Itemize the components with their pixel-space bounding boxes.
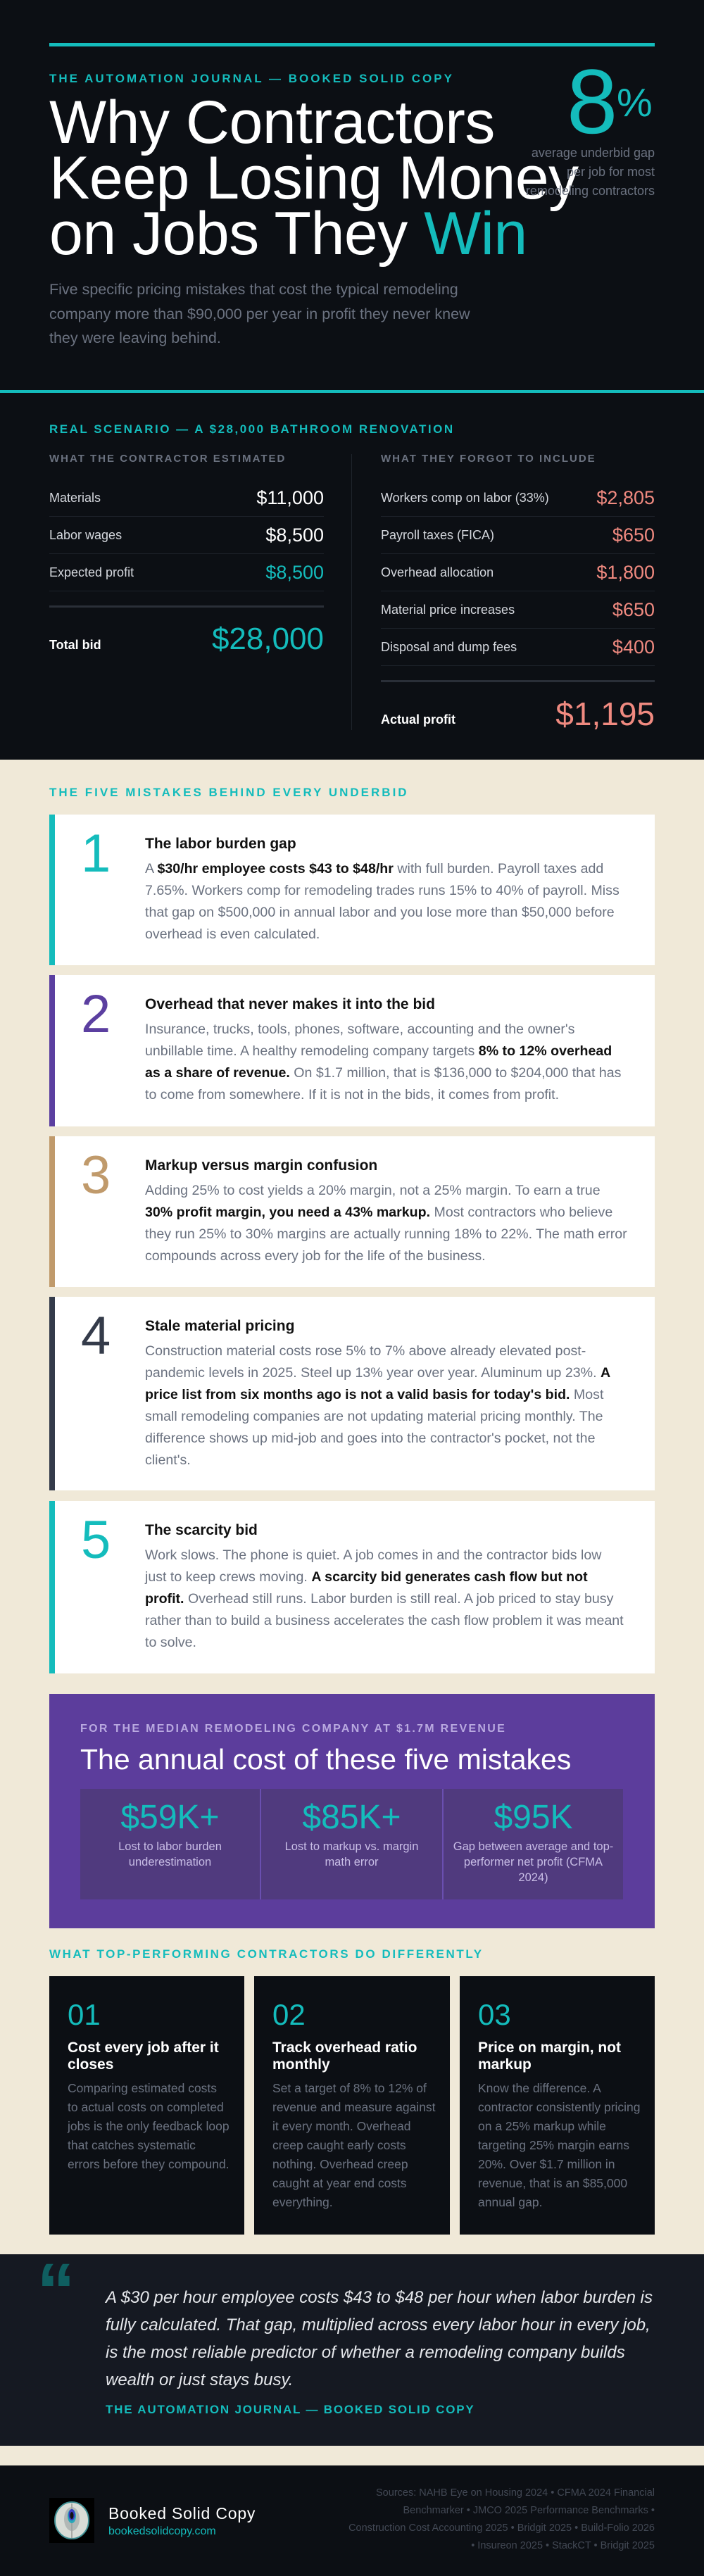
big stat 8%: 8 (567, 50, 617, 153)
panel: contractor estimate: Materials (49, 490, 101, 504)
card: mistake 3: Adding 25% to cost yields a 20% margin, not a 25% margin. To earn a true 30% profit margin, you need a 43% markup. Most contractors who believe they run 25% to 30% margins are actually running 18% to 22%. The math error compounds across every job for the life of the business. (145, 1183, 627, 1264)
card: mistake 5: 5 (81, 1510, 111, 1570)
stat caption: average underbid gap per job for most remodeling contractors (526, 146, 655, 198)
sources: • Insureon 2025 • StackCT • Bridgit 2025 (471, 2540, 655, 2551)
card: mistake 5 (49, 1501, 655, 1673)
panel: forgotten costs: $1,195 (555, 696, 655, 732)
subtitle: Five specific pricing mistakes that cost the typical remodeling company more than $90,000 per year in profit they never knew they were leaving behind. (49, 281, 470, 346)
panel: contractor estimate: $8,500 (265, 524, 324, 545)
stats row: Lost to labor burden underestimation (118, 1840, 222, 1868)
stats row: $95K (494, 1799, 573, 1836)
five mistakes heading: THE FIVE MISTAKES BEHIND EVERY UNDERBID (49, 786, 409, 799)
card: mistake 2: Insurance, trucks, tools, phones, software, accounting and the owner's unbillable time. A healthy remodeling company targets 8% to 12% overhead as a share of revenue. On $1.7 million, that is $136,000 to $204,000 that has to come from somewhere. If it is not in the bids, it comes from profit. (145, 1022, 621, 1102)
panel: forgotten costs: Material price increases (381, 603, 515, 617)
panel: forgotten costs: WHAT THEY FORGOT TO INCLUDE (381, 453, 596, 465)
card: practice 03 (460, 1976, 655, 2235)
sources: Sources: NAHB Eye on Housing 2024 • CFMA 2024 Financial (376, 2487, 655, 2499)
title (49, 89, 579, 268)
title: Keep Losing Money (49, 144, 579, 212)
card: mistake 5: The scarcity bid (145, 1522, 258, 1538)
icon: logo (49, 2498, 94, 2543)
card: mistake 1: A $30/hr employee costs $43 to $48/hr with full burden. Payroll taxes add 7.65%. Workers comp for remodeling trades runs 15% to 40% of payroll. Miss that gap on $500,000 in annual labor and you lose more than $50,000 before overhead is even calculated. (145, 861, 620, 942)
card: practice 01: Cost every job after it closes (68, 2040, 219, 2073)
stats row: $59K+ (120, 1799, 220, 1836)
card: mistake 1: 1 (81, 824, 111, 884)
card: mistake 1: The labor burden gap (145, 836, 296, 852)
panel: contractor estimate: WHAT THE CONTRACTOR ESTIMATED (49, 453, 286, 465)
panel: contractor estimate: $28,000 (212, 622, 324, 656)
card: practice 01: Comparing estimated costs to actual costs on completed jobs is the only feedback loop that catches systematic errors before they compound. (68, 2081, 230, 2171)
footer (0, 2465, 704, 2576)
card: mistake 4: Construction material costs rose 5% to 7% above already elevated post-pandemic levels in 2025. Steel up 13% year over year. Aluminum up 23%. A price list from six months ago is not a valid basis for today's bid. Most small remodeling companies are not updating material pricing monthly. The difference shows up mid-job and goes into the contractor's pocket, not the client's. (145, 1343, 610, 1468)
panel: forgotten costs: $650 (612, 598, 655, 620)
panel: forgotten costs: $650 (612, 524, 655, 545)
panel: forgotten costs (381, 453, 655, 732)
panel: contractor estimate: Expected profit (49, 565, 134, 579)
card: practice 03: 03 (478, 1998, 511, 2031)
card: mistake 4 (49, 1297, 655, 1490)
stats row: Lost to markup vs. margin math error (285, 1840, 418, 1868)
quote text: A $30 per hour employee costs $43 to $48 per hour when labor burden is fully calculated. That gap, multiplied across every labor hour in every job, is the most reliable predictor of whether a remodeling company builds wealth or just stays busy. (106, 2288, 653, 2389)
card: mistake 4: Stale material pricing (145, 1318, 294, 1334)
card: practice 03: Price on margin, not markup (478, 2040, 621, 2073)
sources: Construction Cost Accounting 2025 • Bridgit 2025 • Build-Folio 2026 (348, 2522, 655, 2534)
card: practice 01 (49, 1976, 244, 2235)
panel: contractor estimate: $8,500 (265, 562, 324, 583)
panel: forgotten costs: Overhead allocation (381, 565, 494, 579)
title: Why Contractors (49, 89, 495, 156)
sources (348, 2487, 655, 2551)
panel: forgotten costs: Payroll taxes (FICA) (381, 528, 494, 542)
card: practice 02: Set a target of 8% to 12% of revenue and measure against it every month. Overhead creep caught early costs nothing. Overhead creep caught at year end costs everything. (272, 2081, 436, 2209)
top performers heading: WHAT TOP-PERFORMING CONTRACTORS DO DIFFERENTLY (49, 1947, 484, 1961)
panel: contractor estimate: $11,000 (256, 487, 324, 508)
quote attribution: THE AUTOMATION JOURNAL — BOOKED SOLID COPY (106, 2403, 475, 2416)
panel: forgotten costs: Disposal and dump fees (381, 639, 517, 653)
scenario kicker: REAL SCENARIO — A $28,000 BATHROOM RENOVATION (49, 422, 455, 436)
panel: forgotten costs: $400 (612, 636, 655, 658)
card: mistake 1 (49, 815, 655, 965)
stats row: $85K+ (302, 1799, 401, 1836)
panel: annual cost (49, 1694, 655, 1928)
annual cost kicker: FOR THE MEDIAN REMODELING COMPANY AT $1.7M REVENUE (80, 1723, 506, 1735)
card: practice 02 (254, 1976, 450, 2235)
sources: Benchmarker • JMCO 2025 Performance Benchmarks • (403, 2505, 655, 2516)
card: mistake 2: Overhead that never makes it into the bid (145, 996, 435, 1012)
annual cost heading: The annual cost of these five mistakes (80, 1743, 571, 1776)
panel: forgotten costs: Workers comp on labor (33%) (381, 490, 549, 504)
panel: contractor estimate: Labor wages (49, 528, 122, 542)
header panel (0, 0, 704, 760)
icon: quote mark: “ (37, 2248, 75, 2335)
card: practice 02: Track overhead ratio monthly (272, 2040, 417, 2073)
card: mistake 3 (49, 1136, 655, 1287)
card: practice 03: Know the difference. A contractor consistently pricing on a 25% markup while targeting 25% margin earns 20%. Over $1.7 million in revenue, that is an $85,000 annual gap. (478, 2081, 641, 2209)
kicker: THE AUTOMATION JOURNAL — BOOKED SOLID COPY (49, 72, 454, 85)
card: mistake 3: 3 (81, 1145, 111, 1205)
big stat 8% (567, 50, 653, 153)
card: mistake 2 (49, 975, 655, 1126)
card: mistake 4: 4 (81, 1306, 111, 1366)
card: mistake 2: 2 (81, 984, 111, 1044)
big stat 8%: % (617, 80, 653, 125)
brand name: Booked Solid Copy (108, 2504, 256, 2522)
panel: contractor estimate: Total bid (49, 638, 101, 652)
stats row: Gap between average and top-performer net profit (CFMA 2024) (453, 1840, 613, 1884)
card: mistake 3: Markup versus margin confusion (145, 1157, 377, 1174)
card: mistake 5: Work slows. The phone is quiet. A job comes in and the contractor bids low just to keep crews moving. A scarcity bid generates cash flow but not profit. Overhead still runs. Labor burden is still real. A job priced to stay busy rather than to build a business accelerates the cash flow problem it was meant to solve. (145, 1547, 624, 1650)
stats row (80, 1789, 623, 1899)
panel: forgotten costs: Actual profit (381, 712, 455, 727)
panel: contractor estimate (49, 453, 324, 656)
title: on Jobs They Win (49, 200, 527, 268)
card: practice 01: 01 (68, 1998, 101, 2031)
card: practice 02: 02 (272, 1998, 306, 2031)
panel: forgotten costs: $1,800 (596, 562, 655, 583)
quote panel (0, 2254, 704, 2446)
brand url: bookedsolidcopy.com (108, 2525, 216, 2537)
panel: forgotten costs: $2,805 (596, 487, 655, 508)
